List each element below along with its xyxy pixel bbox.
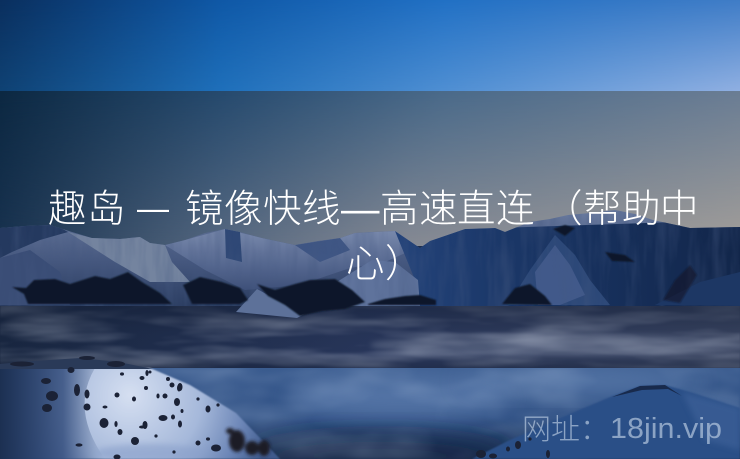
mountain range: [0, 205, 740, 318]
cloud sea: lower bright strip: [149, 368, 740, 459]
hill top darkened: [0, 358, 153, 369]
watermark: [522, 413, 722, 446]
sky: darkened band: [0, 91, 740, 246]
watermark: 网址：: [522, 414, 609, 446]
title: 镜像快线—高速直连（帮助中: [175, 188, 699, 231]
title: —: [137, 190, 169, 226]
cloud sea: darkened strip: [0, 300, 740, 368]
sky: upper clear band: [0, 0, 740, 91]
snowy hill, foreground left: [0, 356, 280, 459]
dense tree cluster: [226, 428, 270, 456]
trees on the hill: [10, 356, 221, 459]
watermark: 18jin.vip: [610, 413, 722, 445]
snowy hill, foreground right: [472, 385, 740, 459]
title: 趣岛: [48, 188, 126, 231]
dark rock outcrops: [12, 225, 697, 316]
title second line: 心）: [346, 243, 424, 286]
